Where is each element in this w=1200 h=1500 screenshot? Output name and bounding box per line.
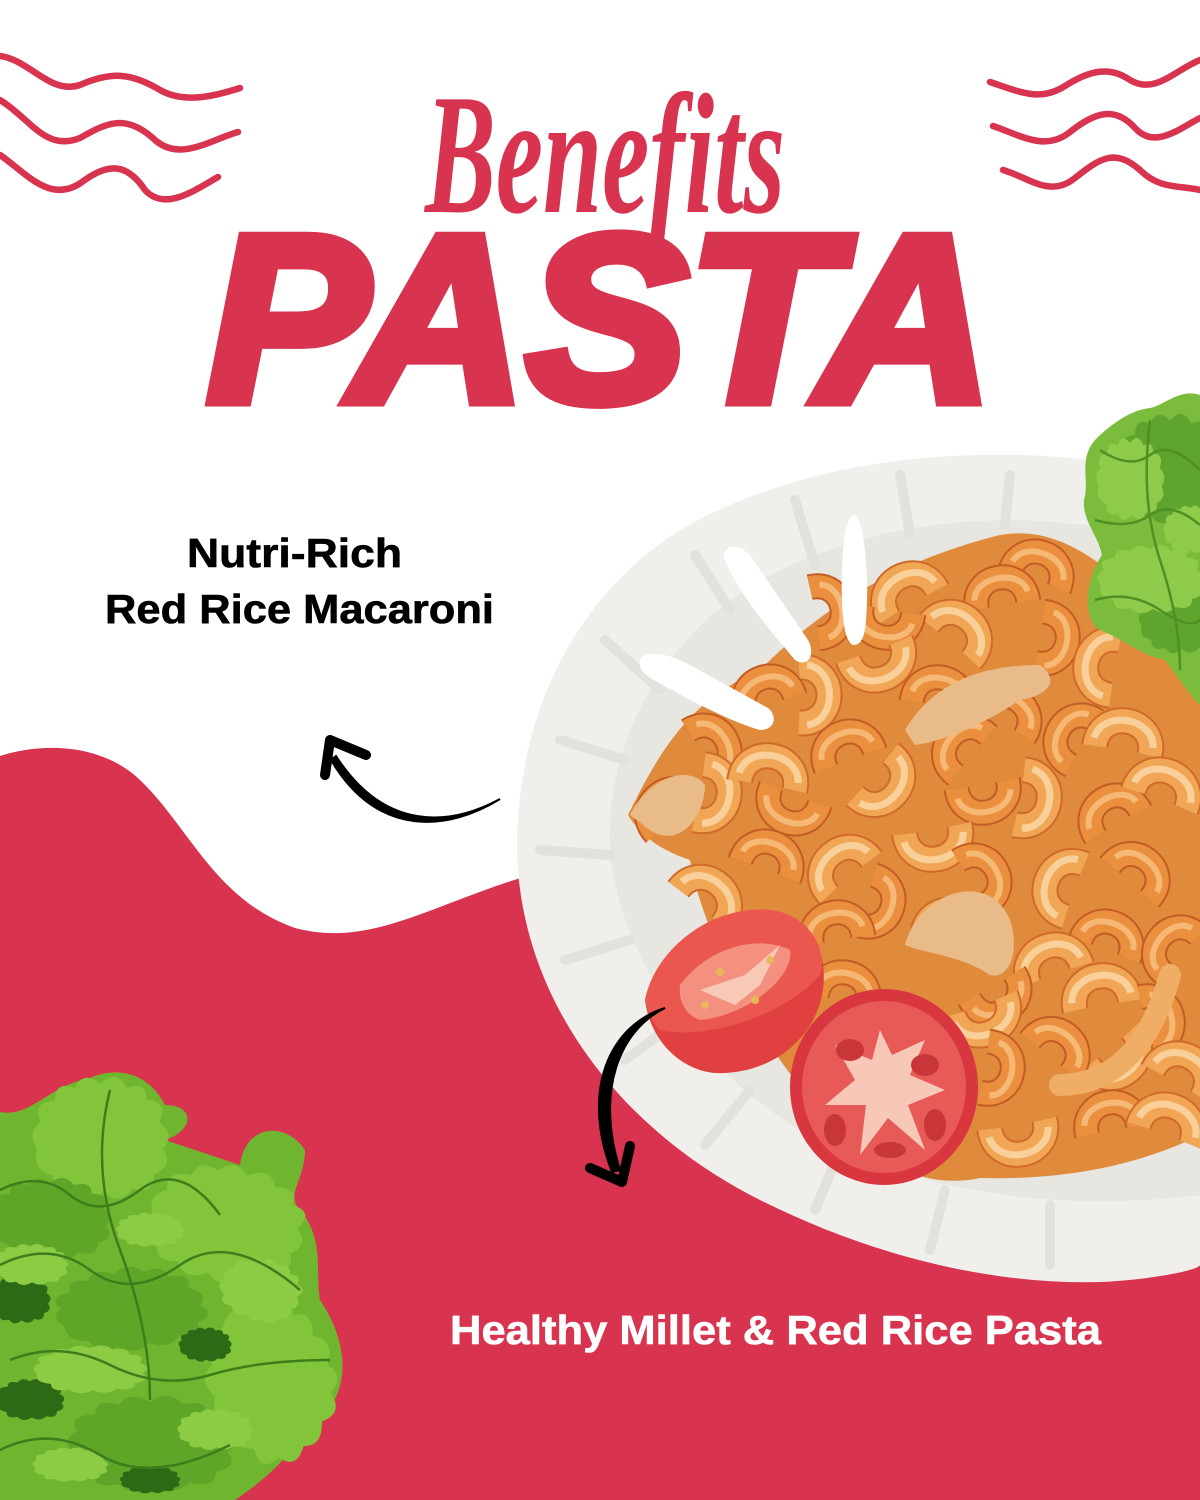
tomato: full slice [790, 989, 978, 1185]
text: Nutri-Rich Red Rice Macaroni [105, 530, 494, 632]
lettuce: bottom left [0, 1072, 362, 1500]
lettuce: top right [1084, 393, 1200, 705]
long macaroni [1060, 975, 1170, 1085]
white accent strokes [639, 515, 867, 730]
text: Nutri-Rich Red Rice Macaroni: Nutri-Rich [187, 530, 402, 576]
text: Nutri-Rich Red Rice Macaroni: Red Rice Macaroni [105, 586, 494, 632]
tomato: half side view [645, 910, 824, 1073]
title: PASTA: PASTA [207, 187, 993, 452]
arrow: to macaroni label [325, 740, 500, 822]
title: Benefits: Benefits [424, 60, 785, 250]
text: Healthy Millet & Red Rice Pasta: Healthy Millet & Red Rice Pasta [450, 1307, 1102, 1353]
arrow: to pasta label [590, 1008, 665, 1182]
decorative squiggles left [0, 56, 240, 199]
red wave background [0, 748, 1200, 1500]
chicken pieces [630, 665, 1050, 976]
pasta heap [628, 533, 1200, 1181]
decorative squiggles right [990, 60, 1200, 190]
plate [517, 455, 1200, 1282]
